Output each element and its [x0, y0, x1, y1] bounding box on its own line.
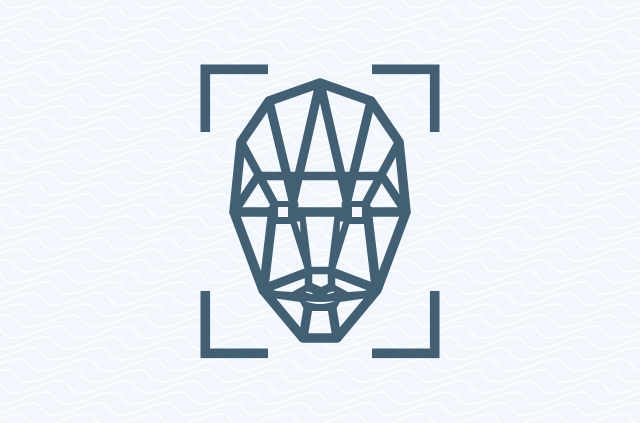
face outline [234, 83, 406, 338]
eye line [234, 207, 406, 217]
icon: scan frame corners [205, 69, 435, 353]
nose [308, 270, 332, 286]
left eye [265, 201, 301, 224]
cheek to nose lines [263, 272, 377, 289]
cheek lines [264, 218, 376, 286]
chin [303, 308, 337, 338]
nose sides [290, 212, 350, 270]
mouth [260, 283, 380, 311]
brow line and temple lines [234, 142, 406, 212]
forehead lines [269, 83, 371, 205]
icon: wireframe face mesh [234, 83, 406, 338]
right eye [339, 201, 375, 224]
lip highlights [306, 292, 334, 294]
